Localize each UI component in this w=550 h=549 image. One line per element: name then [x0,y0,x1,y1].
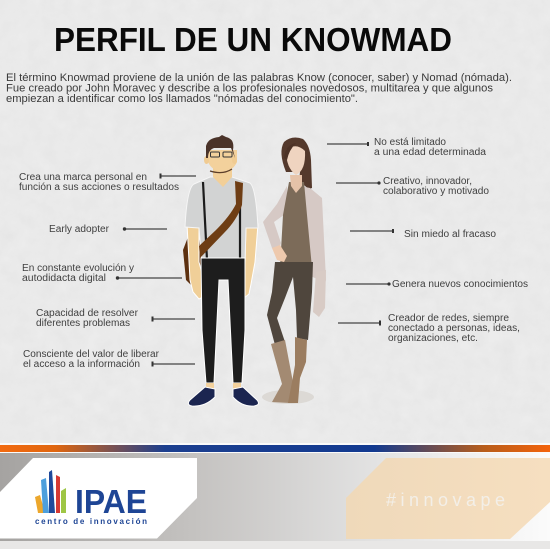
callout: evolucion [22,263,182,284]
colour bar [0,445,550,452]
logo tagline: centro de innovación [35,517,147,526]
callout: creativo [336,176,489,197]
callout: problemas: Capacidad de resolver [36,308,139,319]
callout: problemas [36,308,195,329]
callout: early adopter: Early adopter [49,224,110,235]
woman hand on hip [272,245,287,262]
callout: redes: organizaciones, etc. [388,333,478,344]
callout: conocimientos: Genera nuevos conocimientos [392,279,528,290]
man bag strap [199,181,243,258]
man pants [201,258,245,383]
man arms [187,224,205,299]
callout: informacion: Consciente del valor de liberar [23,349,160,360]
intro text block: El término Knowmad proviene de la unión de las palabras Know (conocer, saber) y Nomad (nómada). [6,72,512,84]
man bag [183,236,201,285]
callout: edad [327,137,486,158]
callout: creativo: colaborativo y motivado [383,186,489,197]
woman legs [267,262,313,345]
callout: early adopter [49,224,167,235]
callout: informacion: el acceso a la información [23,359,140,370]
woman boots [271,340,294,403]
callout: marca personal: función a sus acciones o resultados [19,182,179,193]
callout: marca personal [19,172,196,193]
grey band [0,453,550,541]
callout: informacion [23,349,195,370]
footer [0,443,550,549]
man shirt [185,177,258,262]
intro text block: empiezan a identificar como los llamados "nómadas del conocimiento". [6,93,358,105]
intro text block [6,72,512,105]
man ankles [206,383,241,393]
callout: evolucion: autodidacta digital [22,273,106,284]
callout: fracaso: Sin miedo al fracaso [404,229,496,240]
hashtag panel [346,458,550,539]
logo: IPAE [35,470,147,526]
man neck [213,165,232,187]
woman hair [281,138,312,189]
woman shadow [262,390,314,404]
callout: evolucion: En constante evolución y [22,263,134,274]
logo wordmark: IPAE [75,483,147,520]
woman cardigan [291,184,326,290]
title: PERFIL DE UN KNOWMAD [54,21,452,58]
man hair [206,135,235,158]
callout: edad: a una edad determinada [374,147,486,158]
callout: redes [338,313,520,344]
right callouts [327,137,528,344]
callout: creativo: Creativo, innovador, [383,176,472,187]
illustration: woman [262,138,326,404]
footer background [0,443,550,549]
callout: redes: Creador de redes, siempre [388,313,509,324]
illustration: man [183,135,258,406]
callout: redes: conectado a personas, ideas, [388,323,520,334]
callout: marca personal: Crea una marca personal en [19,172,147,183]
woman head [286,146,305,175]
woman top [280,182,312,268]
man suspenders [203,182,240,260]
hashtag panel: #innovape [386,490,505,510]
left callouts [19,172,196,370]
man shoes [188,387,215,406]
woman forelock [284,143,296,160]
callout: problemas: diferentes problemas [36,318,130,329]
intro text block: Fue creado por John Moravec y describe a los profesionales novedosos, multitarea y que algunos [6,82,493,94]
man head [208,150,237,172]
logo bars [35,470,66,513]
man glasses [210,152,232,157]
callout: edad: No está limitado [374,137,446,148]
white logo panel [0,458,197,538]
